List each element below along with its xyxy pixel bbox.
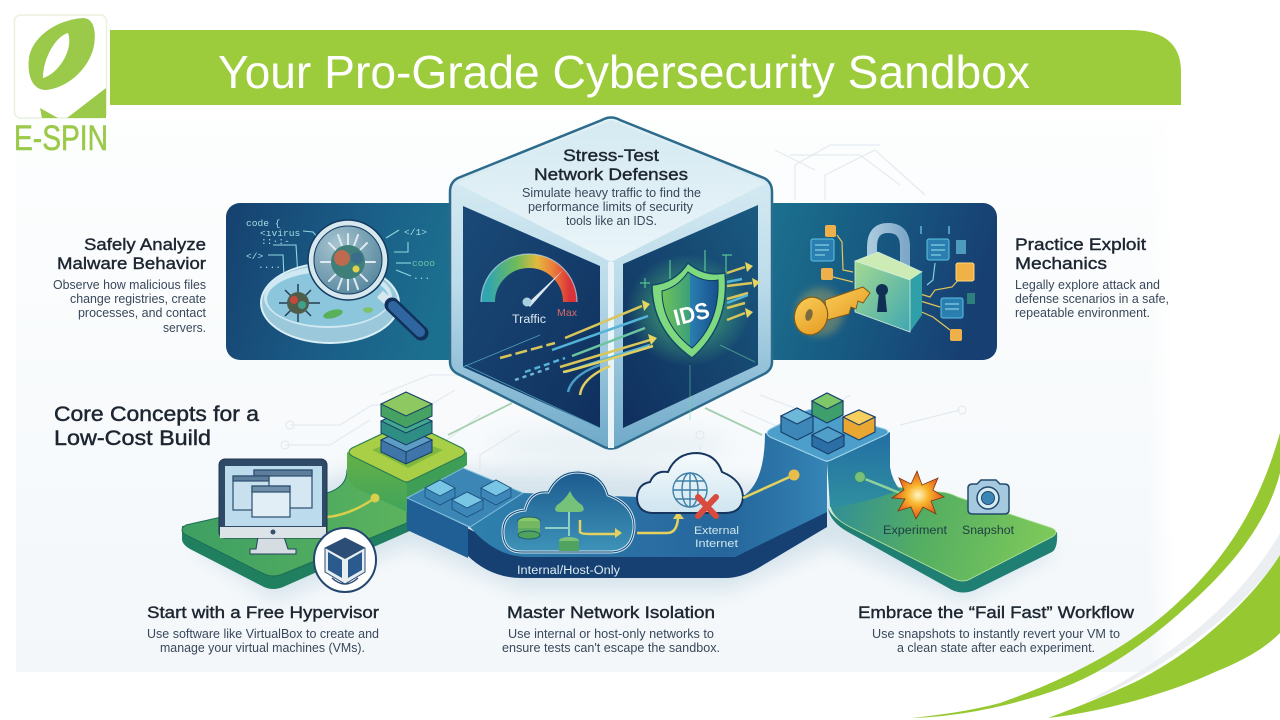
- text: practice exploit mechanics: repeatable environment.: [1015, 306, 1150, 320]
- left face: traffic gauge: [463, 206, 600, 428]
- monitor: [219, 459, 327, 554]
- code text: ...: [413, 271, 430, 282]
- text: master network isolation: Use internal or host-only networks to: [508, 627, 714, 641]
- left face: traffic gauge: Max: [557, 307, 578, 319]
- green platform: [828, 487, 1057, 592]
- connector lines: [448, 403, 762, 435]
- text: safely analyze malware behavior: Malware Behavior: [57, 254, 206, 273]
- raised block: [327, 430, 467, 517]
- arrowheads: [642, 262, 760, 345]
- icon: globe: [673, 473, 707, 507]
- text: embrace fail fast workflow: Use snapshots to instantly revert your VM to: [872, 627, 1120, 641]
- text: embrace fail fast workflow: [858, 603, 1135, 655]
- IDS shield badge: [652, 263, 726, 358]
- text: start with a free hypervisor: [147, 603, 379, 655]
- labels: experiment and snapshot: [883, 525, 1015, 537]
- background circuit lines: [281, 145, 966, 480]
- cube: stress-test network defenses: [450, 118, 772, 448]
- IDS shield badge: IDS: [671, 297, 712, 331]
- text: practice exploit mechanics: defense scenarios in a safe,: [1015, 292, 1169, 306]
- virtual machine windows: [233, 470, 312, 517]
- labels: experiment and snapshot: Snapshot: [962, 525, 1015, 537]
- small blue cubes: [425, 480, 511, 517]
- label: internal/host-only: Internal/Host-Only: [517, 565, 620, 577]
- platform: network isolation: [407, 433, 827, 578]
- text: safely analyze malware behavior: change registries, create: [70, 292, 206, 306]
- code text: [246, 218, 435, 282]
- header bar: [110, 30, 1181, 105]
- text: practice exploit mechanics: [1015, 235, 1169, 320]
- background panel: [16, 118, 1174, 672]
- cube heading: Network Defenses: [534, 165, 688, 184]
- text: start with a free hypervisor: Start with a Free Hypervisor: [147, 603, 379, 622]
- code text: cooo: [412, 258, 435, 269]
- magnifier with virus: [308, 220, 421, 333]
- cube heading: Simulate heavy traffic to find the: [522, 186, 701, 200]
- cube heading: tools like an IDS.: [566, 214, 657, 228]
- code text: </>: [246, 251, 264, 262]
- code text: code {: [246, 218, 281, 229]
- text: safely analyze malware behavior: Safely Analyze: [84, 235, 206, 254]
- icon: experiment burst: [892, 471, 944, 519]
- icon: blocked X: [698, 497, 716, 516]
- label: external internet: Internet: [695, 538, 738, 550]
- text: master network isolation: [502, 603, 720, 655]
- text: embrace fail fast workflow: Embrace the “Fail Fast” Workflow: [858, 603, 1135, 622]
- yellow connector: [743, 470, 800, 498]
- text: master network isolation: Master Network Isolation: [507, 603, 715, 622]
- cube heading: [522, 146, 701, 228]
- connector line and dot: [854, 472, 905, 495]
- code text: <ıvirus: [260, 228, 300, 239]
- heading: core concepts: Low-Cost Build: [54, 427, 211, 450]
- panel: malware analysis illustration: [226, 203, 466, 360]
- stacked cubes: [781, 393, 875, 454]
- code text: </1>: [404, 227, 427, 238]
- text: safely analyze malware behavior: [53, 235, 207, 335]
- text: practice exploit mechanics: Legally explore attack and: [1015, 278, 1160, 292]
- code text: ....: [258, 260, 281, 271]
- external cloud: [637, 453, 743, 516]
- labels: experiment and snapshot: Experiment: [883, 525, 948, 537]
- text: embrace fail fast workflow: a clean state after each experiment.: [897, 641, 1095, 655]
- platform shadow: [190, 470, 1060, 600]
- decorative corner swoosh: [911, 433, 1280, 718]
- arrow to external cloud: [637, 518, 678, 533]
- text: safely analyze malware behavior: processes, and contact: [78, 306, 207, 320]
- text: safely analyze malware behavior: Observe how malicious files: [53, 278, 206, 292]
- internal cloud: [503, 472, 634, 552]
- icon: VirtualBox badge: [314, 528, 376, 592]
- text: practice exploit mechanics: Mechanics: [1015, 254, 1107, 273]
- cube glass body: [450, 118, 772, 448]
- green base: [182, 470, 412, 589]
- label: external internet: [694, 525, 739, 550]
- icon: snapshot camera: [968, 480, 1009, 514]
- text: safely analyze malware behavior: servers.: [163, 321, 206, 335]
- key: [790, 287, 870, 339]
- platform: free hypervisor: [182, 392, 467, 592]
- text: start with a free hypervisor: manage your virtual machines (VMs).: [160, 641, 365, 655]
- text: start with a free hypervisor: Use software like VirtualBox to create and: [147, 627, 379, 641]
- soft halo under cube: [491, 427, 731, 463]
- text: master network isolation: ensure tests can't escape the sandbox.: [502, 641, 720, 655]
- server stack: [381, 392, 432, 464]
- panel: exploit illustration: [760, 203, 997, 360]
- right face: IDS shield: [623, 205, 758, 428]
- traffic arrows: [500, 267, 752, 395]
- petri dish: [261, 263, 399, 343]
- heading: core concepts: Core Concepts for a: [54, 403, 259, 426]
- logo: E-SPIN: [14, 15, 108, 158]
- text: practice exploit mechanics: Practice Exploit: [1015, 235, 1146, 254]
- data chips: [811, 225, 975, 341]
- code text: ::·:-: [261, 236, 290, 247]
- cube heading: Stress-Test: [563, 146, 659, 165]
- left face: traffic gauge: Traffic: [512, 314, 546, 326]
- heading: core concepts: [54, 403, 259, 450]
- platform: fail fast: [767, 393, 1057, 592]
- padlock: [855, 228, 922, 332]
- logo: E-SPIN: E-SPIN: [14, 119, 108, 158]
- right block: [767, 409, 900, 507]
- label: external internet: External: [694, 525, 739, 537]
- cube heading: performance limits of security: [528, 200, 694, 214]
- title: Your Pro-Grade Cybersecurity Sandbox: [218, 46, 1030, 98]
